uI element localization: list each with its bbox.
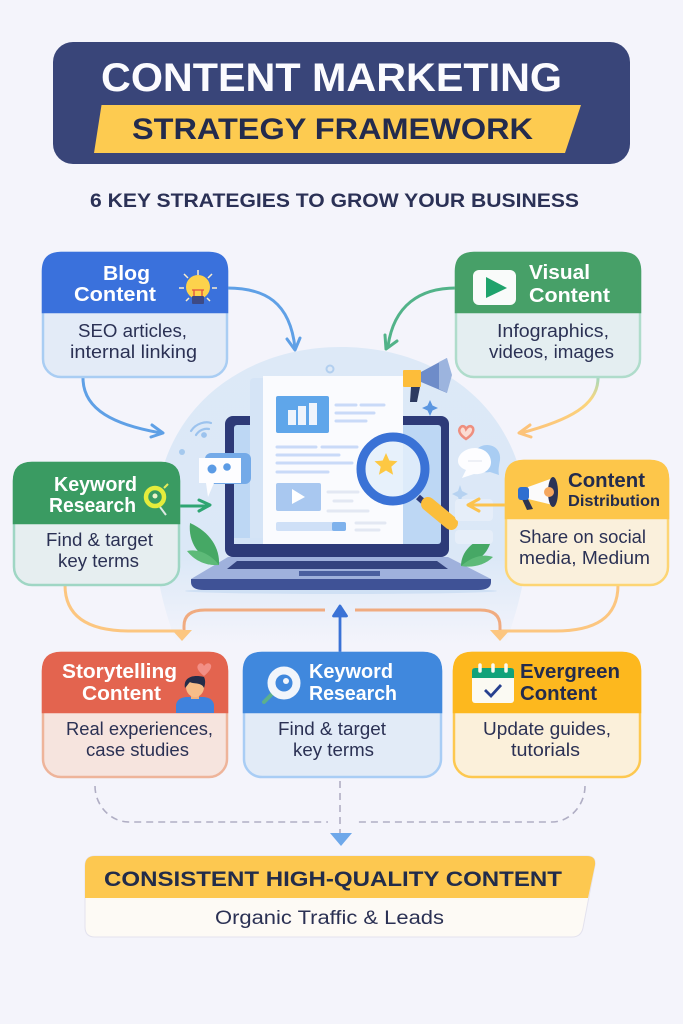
panel: content distribution bbox=[506, 461, 668, 585]
description: Update guides, bbox=[483, 719, 611, 739]
description line two: key terms bbox=[293, 740, 374, 760]
description: Find & target bbox=[278, 719, 386, 739]
icon: heart bbox=[459, 426, 473, 439]
arrow: down to result bbox=[330, 833, 352, 846]
icon: calendar bbox=[472, 665, 514, 703]
description: Share on social bbox=[519, 527, 646, 547]
arrow: up to centre bbox=[334, 606, 346, 653]
icon: megaphone top bbox=[403, 358, 452, 402]
arrow: blog curve down bbox=[83, 378, 163, 437]
yellow ribbon bbox=[94, 105, 581, 153]
heading line two: Content bbox=[529, 284, 610, 307]
arrow: keyword to centre bbox=[179, 500, 210, 511]
heading line two: Content bbox=[520, 682, 597, 705]
description: Find & target bbox=[46, 530, 153, 550]
heading line two: Research bbox=[309, 682, 397, 705]
heading line two: Distribution bbox=[568, 493, 660, 510]
icon: play bbox=[473, 270, 516, 305]
panel: blog content bbox=[43, 253, 227, 377]
panel: storytelling content bbox=[43, 653, 227, 777]
description line two: case studies bbox=[86, 740, 189, 760]
magnifying glass bbox=[361, 437, 451, 523]
dot bbox=[179, 449, 185, 455]
icon: small ring bbox=[326, 366, 334, 372]
heading: Storytelling bbox=[62, 660, 177, 683]
icon: chat bubbles right bbox=[458, 445, 500, 478]
arrow: blog to centre bbox=[227, 288, 300, 350]
description line two: internal linking bbox=[70, 342, 197, 362]
title: content marketing: CONTENT MARKETING bbox=[101, 56, 562, 100]
description: Infographics, bbox=[497, 321, 609, 341]
icon: sparkle bbox=[422, 400, 438, 416]
heading: Visual bbox=[529, 261, 590, 284]
description: Real experiences, bbox=[66, 719, 213, 739]
description line two: videos, images bbox=[489, 342, 614, 362]
icon: person bbox=[176, 663, 214, 713]
pale panels right bbox=[455, 499, 493, 544]
heading: Content bbox=[568, 469, 645, 492]
icon: target magnifier bbox=[146, 484, 168, 515]
icon: wifi bbox=[191, 422, 211, 437]
document bbox=[234, 376, 403, 544]
icon: small sparkle bbox=[452, 485, 468, 503]
panel: evergreen content bbox=[454, 653, 640, 777]
heading: Evergreen bbox=[520, 660, 620, 683]
background dome bbox=[155, 347, 527, 645]
icon: megaphone bbox=[518, 477, 558, 510]
arrow: right orange connector bbox=[355, 585, 618, 641]
icon: magnifier bbox=[264, 670, 296, 702]
subtitle: 6 KEY STRATEGIES TO GROW YOUR BUSINESS bbox=[90, 191, 579, 212]
video tile bbox=[276, 483, 321, 511]
icon: leaves right bbox=[461, 535, 493, 567]
arrow: visual to centre bbox=[385, 288, 456, 349]
dashed connectors bbox=[95, 781, 585, 833]
description line two: key terms bbox=[58, 551, 139, 571]
heading line two: Content bbox=[74, 283, 156, 306]
icon: leaves left bbox=[187, 523, 219, 565]
arrow: visual curve down bbox=[519, 378, 598, 437]
result heading: CONSISTENT HIGH-QUALITY CONTENT bbox=[104, 868, 562, 891]
title banner bbox=[53, 42, 630, 164]
icon: chat bubble left bbox=[199, 453, 251, 497]
title: strategy framework: STRATEGY FRAMEWORK bbox=[132, 113, 533, 146]
description line two: tutorials bbox=[511, 740, 580, 760]
progress bar bbox=[276, 522, 346, 531]
result description: Organic Traffic & Leads bbox=[215, 908, 444, 929]
heading: Keyword bbox=[309, 660, 393, 683]
laptop bbox=[185, 416, 497, 594]
description line two: media, Medium bbox=[519, 548, 650, 568]
arrow: left orange connector bbox=[65, 585, 325, 641]
heading: Blog bbox=[103, 262, 150, 285]
panel: keyword research centre bbox=[244, 653, 441, 777]
arrow: distribution to centre bbox=[468, 499, 506, 511]
panel: visual content bbox=[456, 253, 640, 377]
heading line two: Research bbox=[49, 494, 136, 517]
central illustration bbox=[155, 347, 527, 645]
heading line two: Content bbox=[82, 682, 161, 705]
panel: keyword research left bbox=[14, 463, 179, 585]
description: SEO articles, bbox=[78, 321, 187, 341]
bar chart tile bbox=[276, 396, 329, 433]
heading: Keyword bbox=[54, 473, 137, 496]
icon: light bulb bbox=[179, 270, 217, 304]
panel: result banner bbox=[85, 856, 595, 937]
